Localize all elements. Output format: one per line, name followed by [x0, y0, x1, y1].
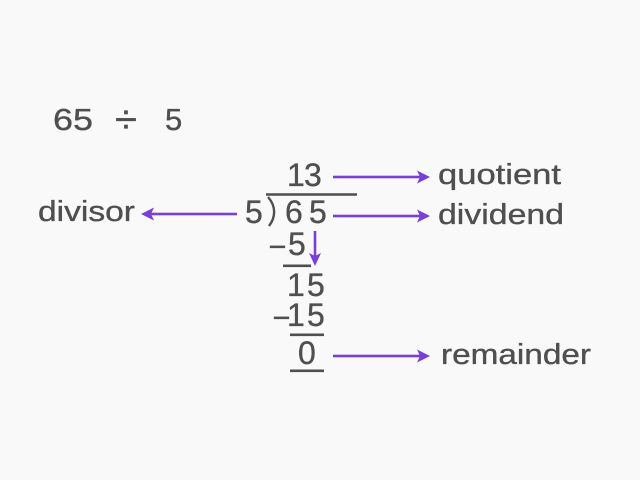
- final zero: 0: [298, 335, 316, 371]
- quotient number: [287, 157, 322, 193]
- quotient number: 3: [304, 157, 322, 193]
- first subtraction: 5: [288, 226, 306, 262]
- second subtraction: 5: [307, 297, 325, 333]
- arrow: bring down: [309, 231, 321, 266]
- arrow: to dividend: [333, 210, 430, 222]
- first subtraction: –: [270, 226, 285, 262]
- arrow: to divisor: [141, 208, 237, 220]
- label: remainder: remainder: [441, 339, 591, 371]
- final zero: [290, 335, 324, 372]
- second subtraction: –: [274, 297, 289, 333]
- label: quotient: quotient: [438, 159, 561, 191]
- remainder of first step: 15: 1: [287, 267, 305, 303]
- heading: 65 ÷ 5: ÷: [115, 98, 137, 142]
- first subtraction: [270, 226, 311, 267]
- label: dividend: dividend: [438, 199, 564, 231]
- second subtraction: [274, 297, 325, 336]
- divisor number: 5: [245, 194, 263, 230]
- dividend number: 5: [309, 194, 327, 230]
- second subtraction: 1: [287, 297, 305, 333]
- arrow: to quotient: [333, 170, 430, 184]
- heading: 65 ÷ 5: 65: [53, 102, 93, 137]
- dividend number: [285, 194, 327, 230]
- remainder of first step: 15: [287, 267, 325, 303]
- arrow: to remainder: [333, 350, 430, 362]
- label: divisor: divisor: [38, 196, 135, 228]
- heading: 65 ÷ 5: 5: [165, 102, 182, 137]
- heading: 65 ÷ 5: [53, 98, 182, 142]
- remainder of first step: 15: 5: [307, 267, 325, 303]
- division bracket: [266, 194, 357, 226]
- dividend number: 6: [285, 194, 303, 230]
- quotient number: 1: [287, 157, 305, 193]
